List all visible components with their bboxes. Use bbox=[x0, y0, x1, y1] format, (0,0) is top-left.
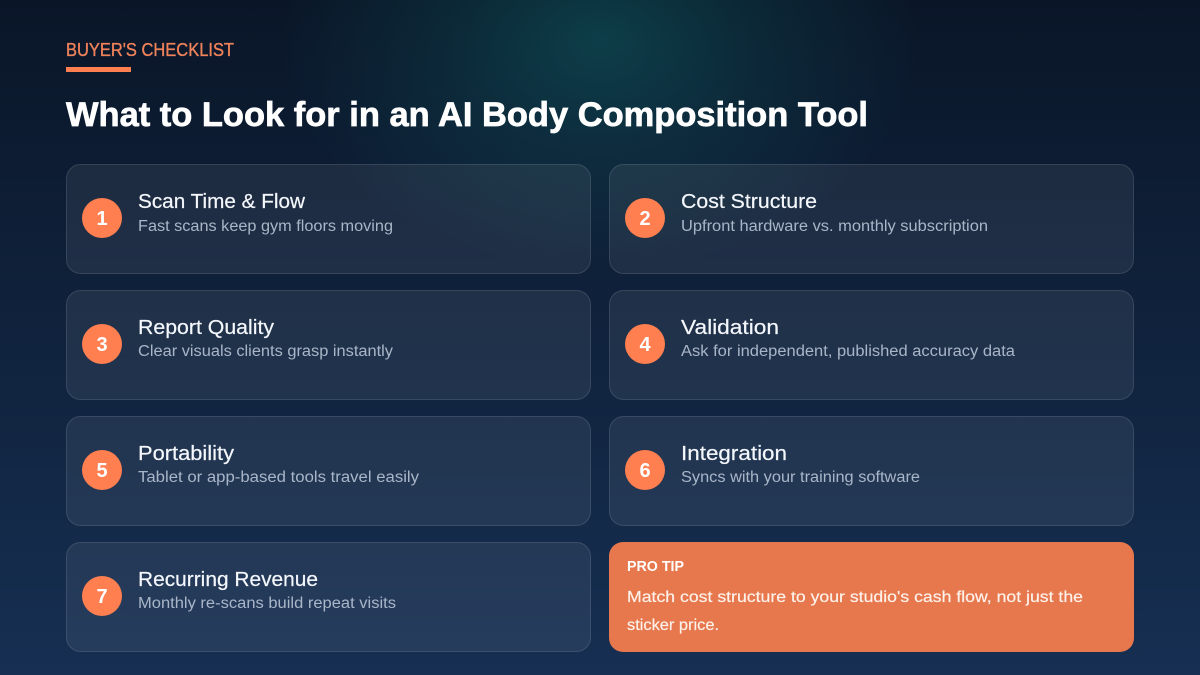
card 4: validation bbox=[610, 290, 1134, 400]
card 3: report quality bbox=[66, 290, 590, 400]
card 7: recurring revenue: Recurring Revenue bbox=[138, 569, 318, 591]
card 7: recurring revenue: Monthly re-scans build repeat visits bbox=[138, 595, 396, 612]
card 3: report quality: Report Quality bbox=[138, 317, 274, 339]
card 4: validation: Ask for independent, published accuracy data bbox=[681, 343, 1015, 360]
card 6: integration bbox=[610, 416, 1134, 526]
callout: pro tip bbox=[609, 542, 1134, 652]
card 4: validation: 4 bbox=[639, 334, 651, 356]
title: What to Look for in an AI Body Composition Tool bbox=[66, 96, 868, 134]
card 2: cost structure: Upfront hardware vs. monthly subscription bbox=[681, 218, 988, 235]
card 7: recurring revenue bbox=[66, 542, 590, 652]
callout: pro tip: Match cost structure to your studio's cash flow, not just the bbox=[627, 589, 1083, 606]
card 2: cost structure: Cost Structure bbox=[681, 191, 817, 213]
card 5: portability: Tablet or app-based tools travel easily bbox=[138, 469, 419, 486]
eyebrow label: BUYER'S CHECKLIST bbox=[66, 39, 234, 60]
card 4: validation: Validation bbox=[681, 317, 779, 339]
card 1: scan time and flow: Scan Time & Flow bbox=[138, 191, 306, 213]
card 2: cost structure bbox=[610, 164, 1134, 274]
card 6: integration: 6 bbox=[639, 460, 651, 482]
card 3: report quality: 3 bbox=[96, 334, 108, 356]
card 7: recurring revenue: 7 bbox=[96, 586, 108, 608]
card 6: integration: Integration bbox=[681, 443, 787, 465]
callout: pro tip: PRO TIP bbox=[627, 559, 684, 575]
card 5: portability: Portability bbox=[138, 443, 234, 465]
card 6: integration: Syncs with your training software bbox=[681, 469, 920, 486]
card 1: scan time and flow: 1 bbox=[96, 208, 108, 230]
eyebrow underline bbox=[66, 67, 131, 72]
callout: pro tip: sticker price. bbox=[627, 617, 719, 634]
card 3: report quality: Clear visuals clients grasp instantly bbox=[138, 343, 393, 360]
card 1: scan time and flow: Fast scans keep gym floors moving bbox=[138, 218, 393, 235]
card 5: portability bbox=[66, 416, 590, 526]
card 1: scan time and flow bbox=[66, 164, 590, 274]
card 5: portability: 5 bbox=[96, 460, 108, 482]
card 2: cost structure: 2 bbox=[639, 208, 651, 230]
